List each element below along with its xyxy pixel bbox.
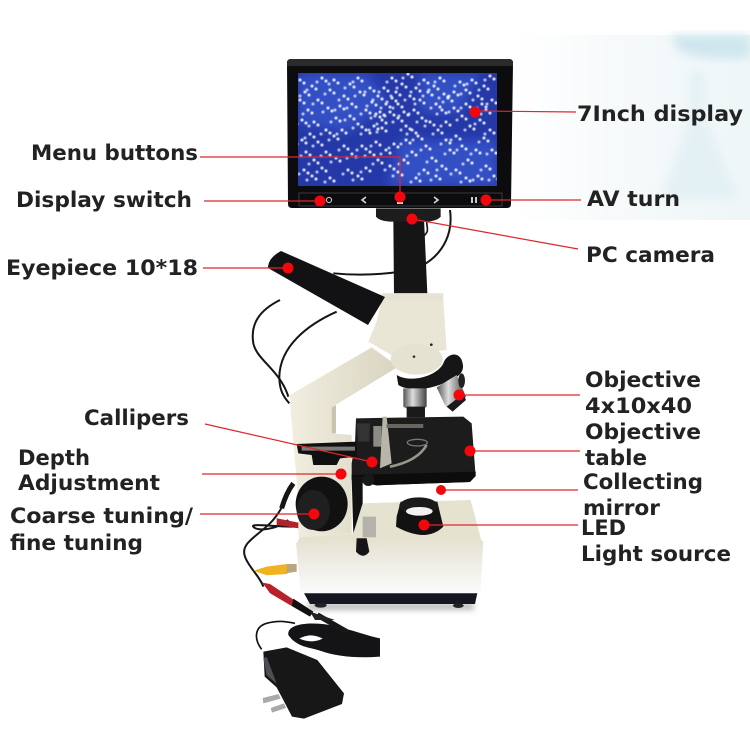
label: Depth Adjustment: Depth [18, 446, 90, 470]
eyepiece tube [268, 251, 385, 325]
label: Collecting mirror: mirror [583, 496, 661, 520]
label: Display switch: Display switch [16, 188, 192, 212]
coarse tuning knob [296, 477, 348, 531]
lamp [396, 497, 443, 535]
base shadow [308, 603, 474, 610]
label: LED Light source [581, 516, 731, 566]
label: AV turn: AV turn [587, 187, 680, 211]
label: Eyepiece 10*18: Eyepiece 10*18 [6, 256, 198, 280]
label: Objective 4x10x40 [585, 368, 701, 418]
microscope body [244, 300, 483, 620]
monitor [287, 59, 513, 208]
label: Coarse tuning/fine tuning [10, 504, 193, 555]
RCA connectors [253, 483, 335, 620]
callout dots [282, 106, 492, 530]
label: LED Light source: Light source [581, 542, 731, 566]
label: 7Inch display: 7Inch display [577, 102, 743, 126]
label: Objective 4x10x40: Objective [585, 368, 701, 392]
label: Objective table [585, 420, 701, 470]
label: Depth Adjustment [18, 446, 160, 495]
callout lines [200, 111, 581, 525]
label: Coarse tuning/fine tuning: fine tuning [10, 531, 143, 555]
label: Collecting mirror [583, 470, 703, 520]
base [297, 500, 482, 545]
label: LED Light source: LED [581, 516, 626, 540]
cables left of microscope [244, 300, 337, 587]
label: Callipers: Callipers [84, 406, 189, 430]
label: Objective table: table [585, 446, 647, 470]
label: Coarse tuning/fine tuning: Coarse tuning/ [10, 504, 193, 528]
stage [297, 417, 476, 533]
label: Menu buttons: Menu buttons [31, 141, 198, 165]
label: Depth Adjustment: Adjustment [18, 471, 160, 495]
label: Collecting mirror: Collecting [583, 470, 703, 494]
monitor stem and camera [333, 208, 451, 300]
label: Objective 4x10x40: 4x10x40 [585, 394, 692, 418]
nosepiece and objectives [397, 355, 466, 417]
background: pale laboratory flask image [515, 35, 750, 220]
viewing head [368, 300, 447, 356]
monitor bezel [287, 59, 513, 208]
button bar [299, 193, 502, 206]
screen with cell image [295, 73, 498, 186]
label: PC camera: PC camera [586, 243, 715, 267]
power adapter and cable [256, 615, 380, 719]
microscope arm [290, 347, 398, 537]
label: Objective table: Objective [585, 420, 701, 444]
